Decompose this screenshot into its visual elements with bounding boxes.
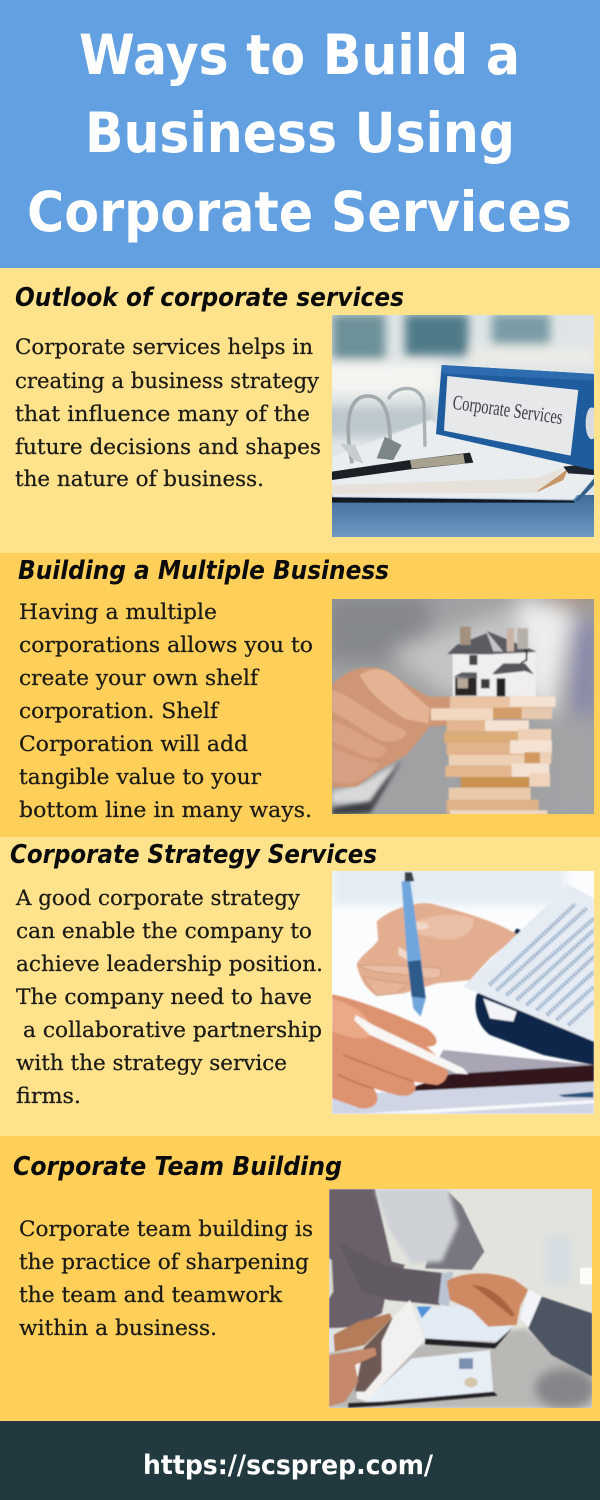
white pen	[354, 1015, 468, 1074]
panel: building a multiple business	[0, 553, 600, 837]
photo: business handshake	[329, 1189, 595, 1408]
blocks	[450, 697, 555, 708]
heading: multiple business: Building a Multiple Business	[18, 556, 389, 586]
text block: team building: the practice of sharpening	[19, 1250, 309, 1275]
text block: strategy services: The company need to have	[16, 985, 312, 1010]
panel: outlook of corporate services	[0, 268, 600, 553]
folder	[475, 928, 594, 1065]
heading: team building: Corporate Team Building	[13, 1152, 342, 1182]
woman in grey suit	[329, 1189, 405, 1328]
clipboard	[365, 1350, 493, 1402]
text block: outlook: that influence many of the	[15, 402, 310, 427]
hands	[333, 1313, 392, 1352]
text block: team building: Corporate team building is	[19, 1217, 313, 1242]
upper hand	[357, 903, 518, 996]
text block: multiple business: corporation. Shelf	[19, 699, 220, 724]
text block: strategy services	[15, 886, 323, 1109]
text block: strategy services: with the strategy service	[16, 1051, 287, 1076]
text block: team building	[19, 1217, 313, 1341]
text block: strategy services: A good corporate strategy	[15, 886, 301, 911]
text block: strategy services: achieve leadership position.	[16, 952, 323, 977]
heading: outlook: Outlook of corporate services	[15, 283, 404, 313]
text block: outlook	[15, 335, 321, 492]
blue pen	[402, 880, 426, 1017]
text block: strategy services: firms.	[16, 1084, 81, 1109]
hand base	[332, 667, 450, 788]
panel: corporate strategy services	[0, 837, 600, 1136]
text block: team building: within a business.	[19, 1316, 217, 1341]
text block: outlook: creating a business strategy	[15, 369, 320, 394]
text block: multiple business: tangible value to your	[19, 765, 262, 790]
text block: multiple business: create your own shelf	[19, 666, 260, 691]
document	[463, 884, 594, 1042]
second paper	[415, 1305, 513, 1342]
text block: outlook: future decisions and shapes	[15, 435, 321, 460]
footer banner	[0, 1421, 600, 1500]
title	[27, 23, 572, 244]
text block: outlook: the nature of business.	[15, 467, 264, 492]
photo: corporate services binder	[323, 314, 598, 538]
man sleeve	[520, 1289, 542, 1327]
panel: corporate team building	[0, 1136, 600, 1421]
tablet	[355, 1300, 425, 1402]
title: Business Using	[85, 101, 515, 165]
photo: hands with pens and document	[332, 865, 594, 1114]
text block: multiple business	[19, 600, 313, 823]
title: Ways to Build a	[79, 23, 520, 87]
photo: house on wooden block tower	[323, 592, 597, 815]
text block: team building: the team and teamwork	[19, 1283, 283, 1308]
text block: strategy services: can enable the company to	[16, 919, 312, 944]
house	[453, 654, 536, 696]
header banner	[0, 0, 600, 268]
handshake	[447, 1273, 528, 1327]
heading: strategy services: Corporate Strategy Services	[10, 840, 377, 870]
text block: multiple business: corporations allows you to	[19, 633, 313, 658]
text block: multiple business: Corporation will add	[19, 732, 248, 757]
text block: multiple business: Having a multiple	[19, 600, 217, 625]
text block: outlook: Corporate services helps in	[15, 335, 313, 360]
footer url: https://scsprep.com/	[143, 1450, 433, 1481]
lower hand	[332, 994, 448, 1109]
text block: multiple business: bottom line in many ways.	[19, 798, 312, 823]
text block: strategy services: a collaborative partnership	[23, 1018, 322, 1043]
